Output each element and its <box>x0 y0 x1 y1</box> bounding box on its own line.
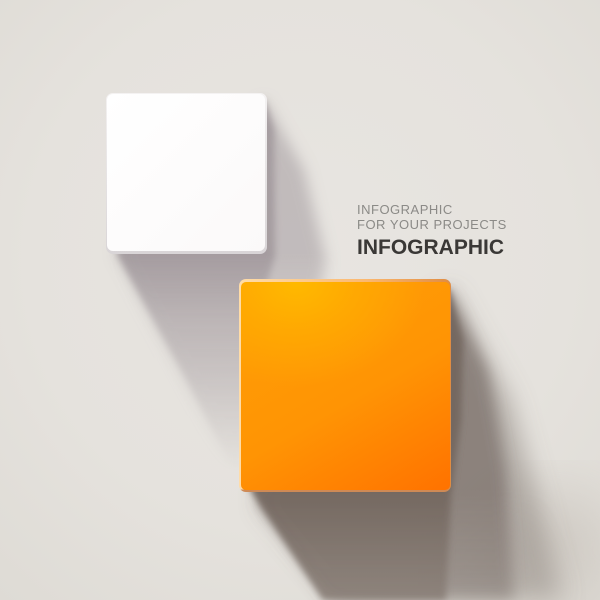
subtitle line 1: INFOGRAPHIC <box>357 202 453 217</box>
shadow: white square <box>116 98 326 480</box>
text block <box>357 202 507 259</box>
shadow: orange square <box>249 288 562 600</box>
white square face <box>107 94 265 251</box>
soft ambient shade at lower right <box>470 500 600 600</box>
white square <box>106 93 267 254</box>
orange square <box>239 279 451 492</box>
drop shadows <box>112 97 600 600</box>
orange square face <box>241 282 450 490</box>
subtitle line 2: FOR YOUR PROJECTS <box>357 217 507 232</box>
title: INFOGRAPHIC <box>357 236 504 259</box>
